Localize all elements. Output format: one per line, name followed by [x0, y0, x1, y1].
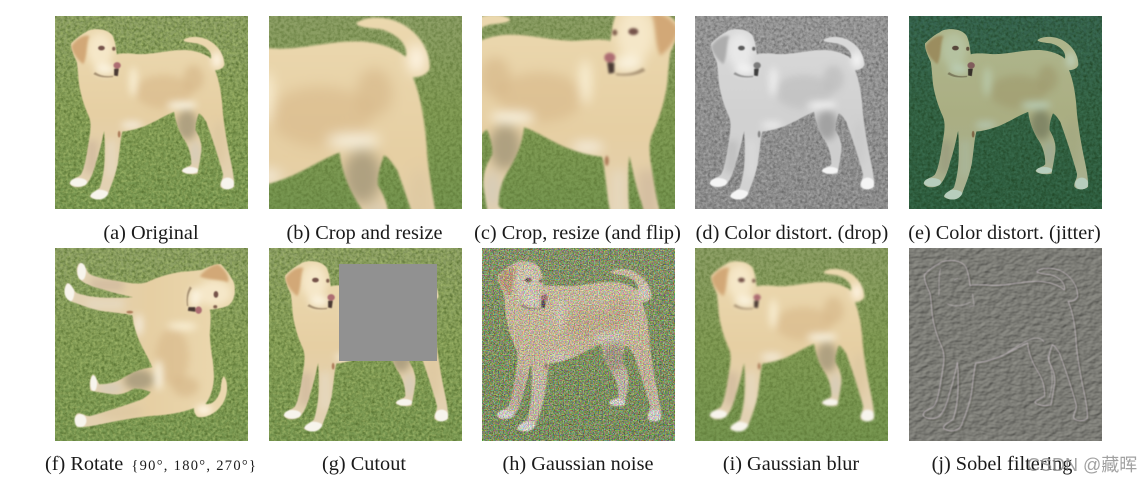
panel: (b) crop and resize — [151, 4, 462, 311]
image: cropped hindquarters — [269, 16, 462, 209]
caption g: (g) Cutout — [322, 453, 406, 475]
image: original dog — [55, 16, 248, 209]
caption e: (e) Color distort. (jitter) — [908, 222, 1101, 244]
gray cutout square — [339, 264, 437, 361]
caption d: (d) Color distort. (drop) — [696, 222, 888, 244]
caption a: (a) Original — [103, 222, 199, 244]
panel: (i) gaussian blur — [695, 248, 888, 475]
watermark: CSDN @藏晖 — [1027, 455, 1137, 475]
image: flipped head crop — [482, 16, 675, 209]
panel: (j) sobel filtering — [909, 248, 1102, 475]
panel: (c) crop, resize and flip — [434, 3, 681, 259]
image: rotated dog — [55, 248, 248, 441]
image: dog with cutout — [269, 248, 462, 441]
caption c: (c) Crop, resize (and flip) — [474, 222, 681, 244]
image: grayscale dog — [695, 16, 888, 209]
panel: (e) color jitter — [908, 16, 1102, 244]
image: embossed dog outline — [909, 248, 1102, 441]
caption f: (f) Rotate {90°, 180°, 270°} — [45, 453, 257, 475]
panel: (h) gaussian noise — [482, 248, 675, 475]
caption j: (j) Sobel filtering — [932, 453, 1072, 475]
panel: (a) original — [55, 16, 248, 244]
image: noisy dog — [482, 248, 675, 441]
caption b: (b) Crop and resize — [286, 222, 442, 244]
panel: (g) cutout — [269, 248, 462, 475]
image: blurred dog — [695, 248, 888, 441]
image: green-tinted dog — [909, 16, 1102, 209]
panel: (d) color drop — [695, 16, 888, 244]
caption h: (h) Gaussian noise — [503, 453, 653, 475]
caption i: (i) Gaussian blur — [723, 453, 859, 475]
panel: (f) rotate — [45, 248, 257, 475]
